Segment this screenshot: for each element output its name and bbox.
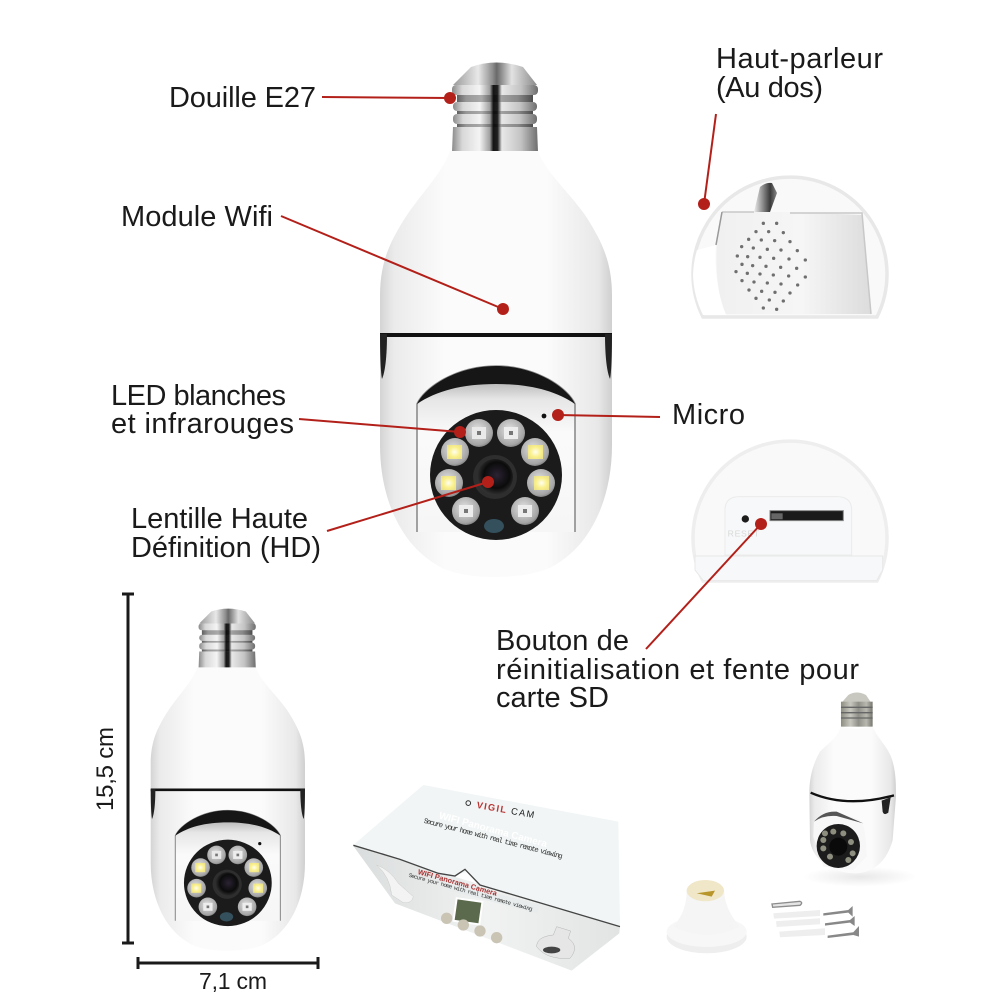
height label: 15,5 cm xyxy=(92,727,119,811)
dimensioned front view camera xyxy=(151,609,305,951)
label: Haut-parleur xyxy=(716,43,883,104)
box logo: VIGIL CAM xyxy=(476,800,536,820)
label: LED: et infrarouges xyxy=(111,408,294,440)
callout lines and dots xyxy=(281,92,767,649)
label: Bouton: carte SD xyxy=(496,682,609,714)
shadow xyxy=(803,867,917,887)
main bulb camera xyxy=(380,62,612,577)
callout: wifi module xyxy=(281,216,509,315)
box flap text: Secure your home with real time remote viewing xyxy=(408,872,533,913)
label: Lentille xyxy=(131,503,321,564)
width label: 7,1 cm xyxy=(199,968,267,994)
label: Bouton: Bouton de xyxy=(496,625,629,657)
screws and anchors xyxy=(772,901,859,938)
label: Haut-parleur: Haut-parleur xyxy=(716,43,883,75)
box flap text: WIFI Panorama Camera xyxy=(417,867,499,898)
box front face xyxy=(353,846,620,971)
label: LED: LED blanches xyxy=(111,380,286,412)
label: Lentille: Définition (HD) xyxy=(131,532,321,564)
accessories: tilted camera, socket, screws xyxy=(667,692,917,953)
label: Bouton: réinitialisation et fente pour xyxy=(496,654,859,686)
callout: E27 socket xyxy=(322,92,456,104)
product box xyxy=(353,785,620,971)
box top text: Secure your home with real time remote viewing xyxy=(423,818,563,861)
label: Douille E27: Douille E27 xyxy=(169,82,316,114)
inset: speaker on the back xyxy=(693,177,887,317)
height dimension bar xyxy=(122,594,134,943)
callout: speaker xyxy=(698,114,716,210)
callout: LEDs xyxy=(299,419,466,438)
inset: reset button and SD slot: RESET xyxy=(728,529,760,539)
callout: lens xyxy=(327,476,494,531)
label: Haut-parleur: (Au dos) xyxy=(716,72,823,104)
box top text: WIFI Panorama Camera xyxy=(438,811,549,850)
width dimension bar xyxy=(138,957,318,969)
tilted camera xyxy=(809,692,896,873)
inset: reset button and SD slot xyxy=(693,441,887,581)
label: LED xyxy=(111,380,294,440)
label: Module Wifi: Module Wifi xyxy=(121,201,273,233)
label: Lentille: Lentille Haute xyxy=(131,503,308,535)
label: Micro: Micro xyxy=(672,399,745,431)
box top face xyxy=(353,785,620,927)
label: Bouton xyxy=(496,625,859,714)
callout: microphone xyxy=(552,409,660,421)
callout: reset and SD xyxy=(646,518,767,649)
lamp socket xyxy=(667,880,747,953)
box pictures xyxy=(377,865,575,958)
